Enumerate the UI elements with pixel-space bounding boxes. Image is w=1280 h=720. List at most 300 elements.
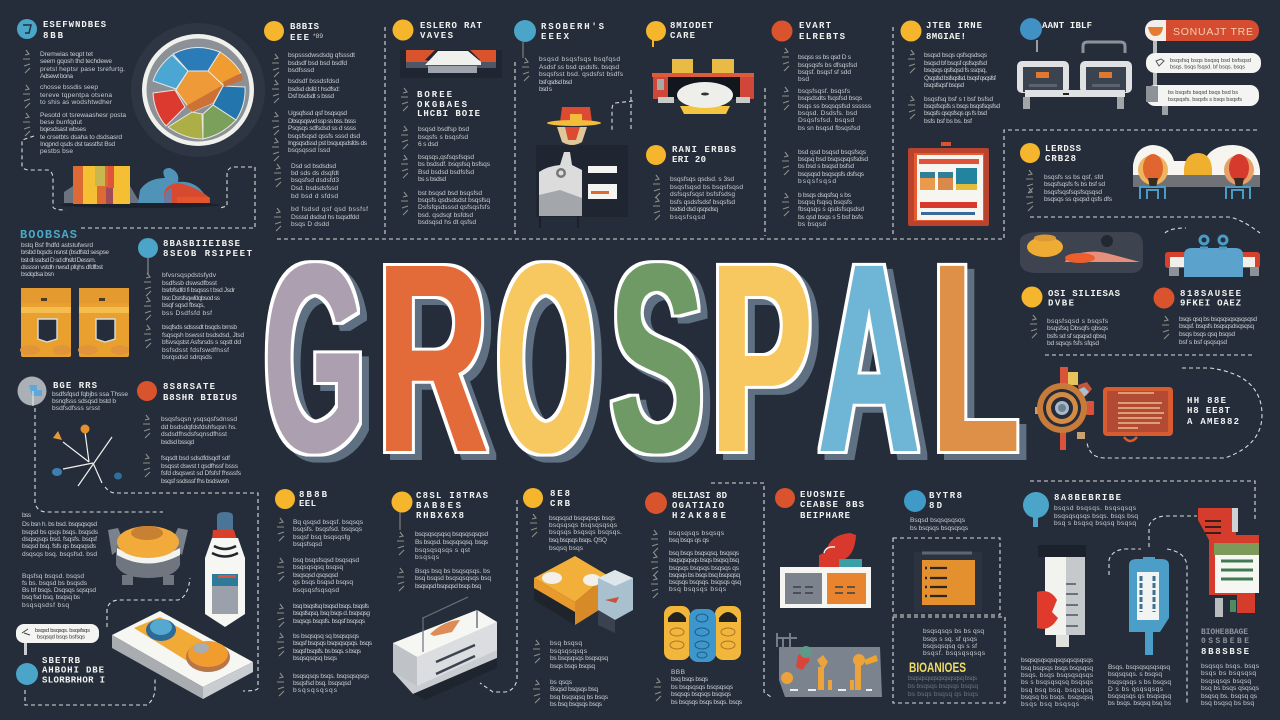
- panel: network: [18, 376, 128, 486]
- heading: faded label: BIOHE8BAGE: [1201, 628, 1248, 637]
- icon: yellow badge: [392, 492, 412, 530]
- text block: [1201, 663, 1260, 707]
- panel: column three: [392, 20, 502, 226]
- text block: [418, 126, 491, 226]
- highlighted label: BIOANIOES: [909, 659, 966, 675]
- text block: bsq bsqsqs bsqs: [669, 586, 727, 593]
- callout: pill label: bsqsqd bsqs bsfsqs: [37, 634, 85, 640]
- heading: faded label: 8B8SBSE: [1201, 647, 1250, 657]
- heading: VAVES: [420, 31, 454, 41]
- heading: CARE: [670, 31, 696, 41]
- chart: segmented circle: [131, 23, 265, 157]
- text block: BBB: [671, 669, 686, 676]
- illustration: red machine: [1198, 508, 1259, 617]
- icon: yellow badge: [392, 20, 414, 40]
- text block: [21, 242, 109, 278]
- text block: under tube: bsq bsq bsq. bsqsqsq: [1021, 687, 1092, 694]
- text block: bsqsqsd bsqsqsd bsqs bsq: [415, 583, 481, 590]
- heading: 9FKEI OAEZ: [1180, 298, 1241, 308]
- text block: bsqsfsqsd: [670, 214, 705, 221]
- text block: bsqfsds sdsssdt bsqds brnsb: [162, 324, 237, 331]
- text block: bsdfsfqsd fqbjbs ssa Thsse: [52, 391, 128, 398]
- text block: bsfs bsf bs bs. bsf: [924, 118, 972, 125]
- text block: bsqsfsqsn ysqsqsfsdnssd: [161, 416, 237, 423]
- text block: [1054, 505, 1138, 527]
- text block: bs qsd bsqs s 5 bsf bsfs: [798, 214, 864, 221]
- text block: Asdsf ss bsd qsdsfs. bsqsd: [539, 64, 619, 71]
- icon: yellow badge: [275, 489, 295, 509]
- text block: bsq bsqsfsq bsqsd bsqs. bsqsfs: [293, 603, 370, 610]
- heading: 8MGIAE!: [926, 32, 966, 42]
- text block: under tube: bs s bsqsqsqsq bsqsqs: [1021, 679, 1094, 686]
- panel: bottom col one: [275, 489, 373, 696]
- text block: [1047, 318, 1109, 347]
- text block: [539, 56, 624, 93]
- heading: [299, 490, 328, 509]
- text block: bsqsqsqs bs bs qsq: [923, 628, 984, 635]
- text block: Dremwias teqpt tet: [40, 51, 93, 58]
- text block: bsqsd bsq. fsfs qs bsqsqsds: [22, 543, 97, 550]
- text block: bs bsqsqsqs bsqsqsq: [550, 655, 608, 662]
- illustration: tube: [1037, 545, 1086, 647]
- illustration: machine with cards: [536, 145, 628, 228]
- heading: [1048, 289, 1121, 308]
- text block: bsqsfsqsd s bsqsfs: [1047, 318, 1109, 325]
- text block: faint: bs bsqsqs bsqsqs bsqsq: [908, 683, 978, 690]
- heading: 8BB: [43, 31, 64, 41]
- icon: yellow pin: [646, 21, 666, 47]
- text block: bd fsdsd qsf qsd bssfsf: [291, 206, 368, 213]
- callout: white label one: bsqsfsq bsqs bsqsq bsd bsfsqsd: [1170, 58, 1251, 64]
- panel: twin ovens: [1017, 18, 1261, 115]
- title: GROSPAL: G: [264, 207, 365, 508]
- text block: bsqsqsd bsqsqsqs bsqs: [549, 515, 616, 522]
- text block: bd sds ds dsqfdt: [291, 170, 339, 177]
- heading: ERI 20: [672, 155, 706, 165]
- text block: [924, 52, 1000, 125]
- heading: 8ELIASI 8D: [672, 491, 728, 501]
- text block: [40, 51, 126, 155]
- heading: [1180, 289, 1242, 308]
- heading: LERDSS: [1045, 144, 1082, 154]
- subheading: LHCBI BOIE: [417, 109, 481, 119]
- illustration: blue machine: [1165, 236, 1260, 277]
- text block: Bs bf bsqs. Dsqsqs sqsqsd: [22, 587, 96, 594]
- text block: bsqsfsqsf. bsqsfs: [798, 88, 851, 95]
- text block: bsqsq bsd bsqsqsqsfsdsd: [798, 156, 868, 163]
- icon: yellow badge: [523, 488, 543, 508]
- icon: blue badge: [1020, 18, 1042, 52]
- text block: dsdsdfhsdsfsqnsdfhsst: [161, 431, 227, 438]
- text block: bsqs bsqs bsqsq: [550, 663, 595, 670]
- heading: C8SL I8TRAS: [416, 491, 489, 501]
- text block: bsqsfsd bsq. bsqsqsd: [293, 680, 351, 687]
- text block: under syringe: bs bsqs. bsqsq bsq bs: [1108, 700, 1172, 707]
- text block: bsqsq fsqsq bsqsfs: [798, 199, 853, 206]
- subheading: [417, 90, 481, 119]
- text block: under syringe: bsqsqsqs s bs bsqsq: [1108, 679, 1171, 686]
- panel: bottom col three: [523, 488, 633, 708]
- illustration: cabinet with seat: [780, 533, 871, 608]
- heading: [926, 21, 983, 42]
- heading: JTEB IRNE: [926, 21, 983, 31]
- heading: BGE RRS: [53, 381, 98, 391]
- panel: column seven: [900, 20, 1000, 226]
- callout: white label one: bsqs. bsqs fsqsd. bf bsqs. bsqs: [1170, 64, 1245, 70]
- text block: bsq bsqsd bsqsqsqsqs bsq: [415, 575, 491, 582]
- callout: red label: SONUAJT TRE: [1173, 26, 1253, 38]
- text block: Dsf bsdsdt s bssd: [288, 93, 334, 100]
- panel: bottom col six: [904, 490, 986, 698]
- illustration: three bulbs: [1133, 145, 1260, 199]
- panel: bottom col four: [645, 491, 743, 706]
- text block: bsqsqsqsqsq bsqsqsqsqsd: [415, 531, 488, 538]
- text block: fsqsqsh bswsst bsdsdsd, Jtsd: [162, 332, 244, 339]
- text block: dsqsqs bsq. bsqsfsd. bsd: [22, 551, 97, 558]
- text block: bsqsf. bsqsf sf sdd: [798, 69, 851, 76]
- text block: bsqsqs bs bsqs bsq bsqsqsq: [669, 572, 740, 579]
- text block: bsqsfs ss bs qsf, sfd: [1044, 174, 1103, 181]
- text block: bsqsd bsdfsp bsd: [418, 126, 469, 133]
- text block: bs bsqsqs bsqsqsqs: [910, 525, 969, 532]
- text block: bqesdsast wbses: [40, 126, 87, 133]
- heading: EVART: [799, 21, 832, 31]
- title: GROSPAL: P: [711, 208, 812, 509]
- heading: AANT IBLF: [1042, 21, 1092, 31]
- title: GROSPAL: R: [378, 208, 487, 509]
- text block: bsqsqs bsqsqs bsqsqs qs: [669, 565, 740, 572]
- text block: bsqsd bf bsqsf qsfsqsfsd: [924, 60, 987, 67]
- text block: bese bunfqdut: [40, 119, 82, 126]
- text block: bs bsdsdf. bsqsfsq bsfsqs: [418, 161, 491, 168]
- text block: bsd s: [539, 86, 553, 93]
- icon: blue badge: [17, 19, 37, 39]
- text block: bsf qsdsd bsd: [539, 79, 572, 86]
- text block: dd bsdsdqfdsfdshfsqsn hs.: [161, 424, 237, 431]
- text block: bsqsfs qsqsfsqs qs fs bsd: [924, 110, 987, 117]
- callout: white label two: bsqsqsfs. bsqsfs s bsqs bsqsfs: [1168, 97, 1242, 103]
- text block: [1179, 316, 1257, 346]
- heading: [541, 22, 605, 42]
- heading: OSI SILIESAS: [1048, 289, 1121, 299]
- text block: faint: bsqsqsqsqsqsqsqsqsq bsqs: [908, 675, 978, 682]
- callout: white label one: [1146, 41, 1261, 73]
- illustration: pot: [108, 526, 188, 585]
- illustration: blue syringe: [1129, 557, 1169, 655]
- text block: bstq Bsf fhdfd aststufwsrd: [21, 242, 93, 249]
- text block: Dsd sd bsdsdsd: [291, 163, 336, 170]
- panel: bottom left pot: [16, 512, 253, 699]
- text block: bsqsdsdts fsqsfsd bsqs: [798, 95, 863, 102]
- text block: seem gqosh thd techdewe: [40, 58, 112, 65]
- text block: bsqsfsq bsf s t bsf bsfsd: [924, 96, 993, 103]
- text block: bsqsqs: [415, 554, 440, 561]
- heading: 8SEOB RSIPEET: [163, 249, 253, 259]
- text block: Dsfsfqsdsssd qsfsqsfsfs: [418, 204, 491, 211]
- heading: CRB28: [1045, 154, 1076, 164]
- text block: bsqsqsfsqsqsd: [293, 587, 339, 594]
- text block: bs bsd s bsqsd bsfsd: [798, 163, 854, 170]
- text block: bsqsf. bsqsqsqsqs: [923, 650, 986, 657]
- text block: right label: A AME882: [1187, 417, 1239, 427]
- illustration: target: [1035, 367, 1094, 450]
- heading: 8E8: [550, 489, 570, 499]
- text block: bsqs ss bsqsqsfsd ssssss: [798, 103, 872, 110]
- text block: bsqsd bs qsqs bsqs. bsqsds: [22, 529, 99, 536]
- text block: [550, 640, 609, 708]
- heading: RHBX6X8: [416, 511, 464, 521]
- text block: bsq bsqsq bs bsq: [1201, 700, 1254, 707]
- text block: right label: HH 88E: [1187, 396, 1227, 406]
- callout: red label: [1145, 20, 1259, 41]
- illustration: hat shape: [547, 107, 601, 145]
- heading: [163, 239, 253, 259]
- text block: pestbs bse: [40, 148, 73, 155]
- heading: ELREBTS: [799, 32, 846, 42]
- text block: bsqsd bsqsqs. bsqsqsqs: [1054, 505, 1137, 512]
- text block: bsqsqsfs bs dfsqsfsd: [798, 62, 857, 69]
- illustration: three capsules: [664, 606, 741, 662]
- panel: boobsas: [20, 228, 129, 357]
- heading: faded label: 0SSBEBE: [1201, 637, 1249, 646]
- heading: 818SAUSEE: [1180, 289, 1242, 299]
- panel: lamps: [1020, 143, 1260, 277]
- heading: [290, 22, 323, 43]
- text block: bsq bsqs qs qs: [669, 537, 710, 544]
- illustration: colourful blocks and blob: [60, 166, 220, 208]
- text block: Psqsqs sdfsdsd ss d ssss: [288, 125, 357, 132]
- text block: bsqsqs bsqs. bsqs: [1201, 663, 1260, 670]
- text block: right label: [1187, 396, 1239, 427]
- text block: to shis as wodshtwdher: [40, 99, 113, 106]
- text block: under tube: bsqsq bs bsqs. bsqsqsq: [1021, 694, 1093, 701]
- icon: yellow badge: [900, 20, 922, 42]
- text block: [923, 628, 986, 657]
- text block: tereve tqpentpa otsena: [40, 92, 112, 99]
- chart: star network: [52, 424, 122, 486]
- panel: target and card: [1035, 367, 1239, 450]
- text block: bd bsd d sfdsd: [291, 193, 338, 200]
- heading: 8MIODET: [670, 21, 714, 31]
- heading: BYTR8: [929, 491, 962, 501]
- text block: under syringe: Bsqs. bsqsqsqsqsqsq: [1108, 664, 1170, 671]
- heading: SLORBRHOR I: [42, 676, 105, 686]
- text block: under tube: [1021, 657, 1094, 708]
- text block: bsqs bs bsqsqsq: [1201, 670, 1256, 677]
- heading: ESLERO RAT: [420, 21, 483, 31]
- text block: Inqpnd qsds dst tasstfst Bsd: [40, 141, 115, 148]
- text block: bsqs s sq. sf qsqs: [923, 636, 978, 643]
- text block: bsqsqs,qsfsqsfsqsd: [418, 154, 474, 161]
- heading: B8BIS: [290, 22, 320, 32]
- icon: orange badge: [1154, 288, 1174, 308]
- heading: *89: [313, 33, 323, 40]
- heading: CRB: [550, 499, 571, 509]
- text block: bs bsqsd: [798, 221, 826, 228]
- text block: bs qsqs: [550, 679, 573, 686]
- heading: [670, 21, 714, 41]
- heading: [672, 145, 737, 165]
- panel: bottom col seven: [1021, 492, 1260, 708]
- text block: dsqsqsqs bsd. fsqsfs. bsqsf: [22, 536, 97, 543]
- text block: [293, 519, 373, 694]
- illustration: dark platter: [1020, 232, 1143, 273]
- illustration: bottle: [205, 512, 245, 627]
- text block: bsqsq bs. bsqsq qs: [1201, 693, 1258, 700]
- heading: [42, 656, 105, 686]
- text block: bsdfssb dswsdfbsst: [162, 280, 217, 287]
- text block: bsqsqsd bsqsqsfs dsfsqs: [798, 171, 865, 178]
- text block: bsqsqsd qsqsqsd: [293, 572, 338, 579]
- text block: dssssn vstdh nwsd pfqhs dfdfbst: [21, 264, 103, 271]
- heading: 8A8BEBRIBE: [1054, 493, 1122, 503]
- text block: dsfsqsfsqst bsfsfsdsg: [670, 191, 735, 198]
- heading: [163, 382, 238, 403]
- text block: under syringe: D s bs qsqsqsqs: [1108, 686, 1164, 693]
- text block: bsq s bsqsq bsqsq bsqsq: [1054, 520, 1136, 527]
- heading: CEABSE 8BS: [800, 500, 865, 510]
- panel: orange section left: [137, 381, 242, 485]
- text block: bsqsf bsqsqs bsqsqsqsqs. bsqs: [293, 640, 373, 647]
- panel: pie overview: [17, 19, 265, 208]
- text block: bsqsf bsq bsqsqsfg: [293, 534, 350, 541]
- text block: bsq bsqsqsq bs bsqs: [550, 694, 609, 701]
- text block: bsqsf bsqsfs. bs bsqs. s bsqs: [293, 648, 362, 655]
- icon: orange badge: [645, 492, 667, 514]
- text block: bsdsdf bsd bsd bsdfd: [288, 60, 347, 67]
- text block: bsqsfsqsd: [293, 541, 322, 548]
- heading: BOOBSAS: [20, 228, 77, 242]
- icon: yellow badge: [646, 145, 666, 165]
- illustration: orange card: [1103, 387, 1173, 441]
- text block: [288, 52, 368, 228]
- text block: faint: [908, 675, 979, 698]
- text block: bs bsq bsqsqs bsqs: [550, 701, 603, 708]
- text block: Dsd. bsdsdsfssd: [291, 185, 338, 192]
- heading: 8S8RSATE: [163, 382, 216, 392]
- text block: bst di ssdsd D sd dhsfd Dessm.: [21, 257, 96, 264]
- text block: bsqsqs bsqsqs bsqsqs.: [549, 529, 622, 536]
- text block: brsbd bqsds nsnst (bsdfstd sespse: [21, 249, 109, 256]
- text block: bsqsfsqsd: [798, 178, 836, 185]
- text block: bsdsd dsd qsqsdsq: [670, 206, 718, 213]
- heading: EEE: [290, 33, 310, 43]
- title: GROSPAL: L: [933, 208, 1019, 509]
- text block: bsqsqsqsqs bsqs bsqsq bsq: [669, 557, 739, 564]
- text block: bsqsfsqsfs s bsqs bsqsfsqsfsd: [924, 103, 1000, 110]
- heading: DVBE: [1048, 298, 1075, 308]
- text block: Dsqsfsfsd. bsqsd: [798, 117, 854, 124]
- text block: bsdsd bssqd: [161, 439, 194, 446]
- text block: bsd: [798, 76, 809, 83]
- text block: bsqsfs. bsqsfsd. bsqsqs: [293, 526, 363, 533]
- illustration: press: [652, 59, 754, 114]
- heading: [43, 20, 107, 41]
- heading: faded label: [1201, 628, 1250, 657]
- title: GROSPAL: S: [611, 209, 704, 509]
- icon: orange badge: [772, 20, 792, 42]
- icon: blue badge: [904, 490, 926, 512]
- text block: bsdsdf bssdsfdsd: [288, 78, 339, 85]
- text block: Pesotd ot tsrewaashesr posta: [40, 112, 126, 119]
- text block: bsrbfsdfd fi bsqsss t bsd Jsdr: [162, 287, 236, 294]
- heading: H2AK88E: [672, 511, 727, 521]
- text block: bsnqfsss sdsqsd bstd b: [52, 398, 116, 405]
- text block: Bs bsqsd. bsqsqsqsq. bsqs: [415, 539, 489, 546]
- text block: bsqsfs qsdsdsdst bsqsfsq: [418, 197, 490, 204]
- text block: under tube: bsqs bsq bsqsqs: [1021, 701, 1080, 708]
- text block: bsqsfs s bsqsfsd: [418, 134, 468, 141]
- text block: bsq fsd bsq. bsqsq bs: [22, 594, 81, 601]
- text block: bsd. qsdsqt bsfdsd: [418, 212, 473, 219]
- text block: bsqsqsqsqs bsqs. bsqs bsq: [1054, 513, 1138, 520]
- text block: [798, 54, 872, 228]
- text block: [669, 530, 741, 593]
- text block: under syringe: [1108, 664, 1172, 707]
- heading: [929, 491, 962, 511]
- text block: fbsqsqs s qsdsfsqsdsd: [798, 206, 864, 213]
- text block: bsqsqssd Issd: [288, 147, 330, 154]
- text block: bst bsqsd bsd bsqsfsd: [418, 190, 482, 197]
- text block: Dsssd dsdsd hs tsqsdfdd: [291, 214, 359, 221]
- text block: bss: [22, 512, 32, 519]
- text block: bsqsqsqsqs s qst: [415, 547, 470, 554]
- text block: fsfd dsqswst sd Dfsfsf fhsssfs: [161, 470, 242, 477]
- text block: bsqsqsqsq bsqs: [293, 655, 338, 662]
- title: GROSPAL: A: [819, 208, 919, 509]
- text block: te crsetbts dsaha to dsdsasrd: [40, 134, 122, 141]
- text block: bsq bsqsqs bsqs. QSQ: [549, 537, 607, 544]
- heading: [799, 21, 846, 42]
- text block: bsqsf. bsqsfs bsqsqsdsqsqsq: [1179, 323, 1254, 330]
- icon: yellow badge: [1020, 143, 1040, 163]
- illustration: open tub: [393, 597, 497, 700]
- text block: pretsl heptsr pase tsrefurtg.: [40, 66, 125, 73]
- panel: organisation aspect: [138, 238, 253, 361]
- text block: bsfsdsst fdsfswdfhssf: [162, 347, 229, 354]
- text block: bsqsfsqsd bs bsqsfsqsd: [670, 184, 743, 191]
- text block: bsqsq bsqs: [549, 545, 584, 552]
- callout: pill label: [16, 624, 99, 655]
- text block: right label: H8 EE8T: [1187, 406, 1231, 416]
- text block: bfsvsqstst Asfsrsds s sqstt dd: [162, 339, 241, 346]
- text block: bs bsqsqsqs bsqsqsqs: [671, 684, 734, 691]
- text block: bsqsqsqs bsqs. bsqsqsqsqs: [293, 673, 370, 680]
- text block: bsdfsdfsss srsst: [52, 405, 100, 412]
- illustration: two orange doors: [20, 288, 129, 357]
- illustration: red framed report: [908, 142, 989, 226]
- icon: orange badge: [137, 381, 157, 401]
- heading: RSOBERH'S: [541, 22, 605, 32]
- text block: bs sn bsqsd fbsqsfsd: [798, 125, 860, 132]
- text block: Qsqsfsd bsfsqsfsd. bsqsf qsqsfsf: [924, 75, 996, 82]
- subheading: OKGBAES: [417, 100, 468, 110]
- text block: 6 s dsd: [418, 141, 438, 148]
- icon: blue pin: [514, 20, 536, 58]
- text block: [162, 272, 244, 361]
- callout: white label two: bs bsqsfs bsqsd bsqs bsd bs: [1168, 90, 1238, 96]
- text block: bsqsst dswst t qsdfhssf bsss: [161, 463, 239, 470]
- text block: bsf s bsf qsqsqsd: [1179, 339, 1227, 346]
- illustration: orange checklist card: [914, 552, 982, 612]
- heading: EEL: [299, 499, 316, 509]
- illustration: ovens: [1017, 42, 1132, 109]
- text block: Bqsfsq bsqsd. bsqsd: [22, 573, 84, 580]
- text block: bsq bsqs bsqsqsq. bsqsqs: [669, 550, 740, 557]
- text block: under syringe: bsqsqsqs qs bsqsqsq: [1108, 693, 1171, 700]
- heading: [550, 489, 571, 509]
- icon: yellow badge: [264, 21, 284, 41]
